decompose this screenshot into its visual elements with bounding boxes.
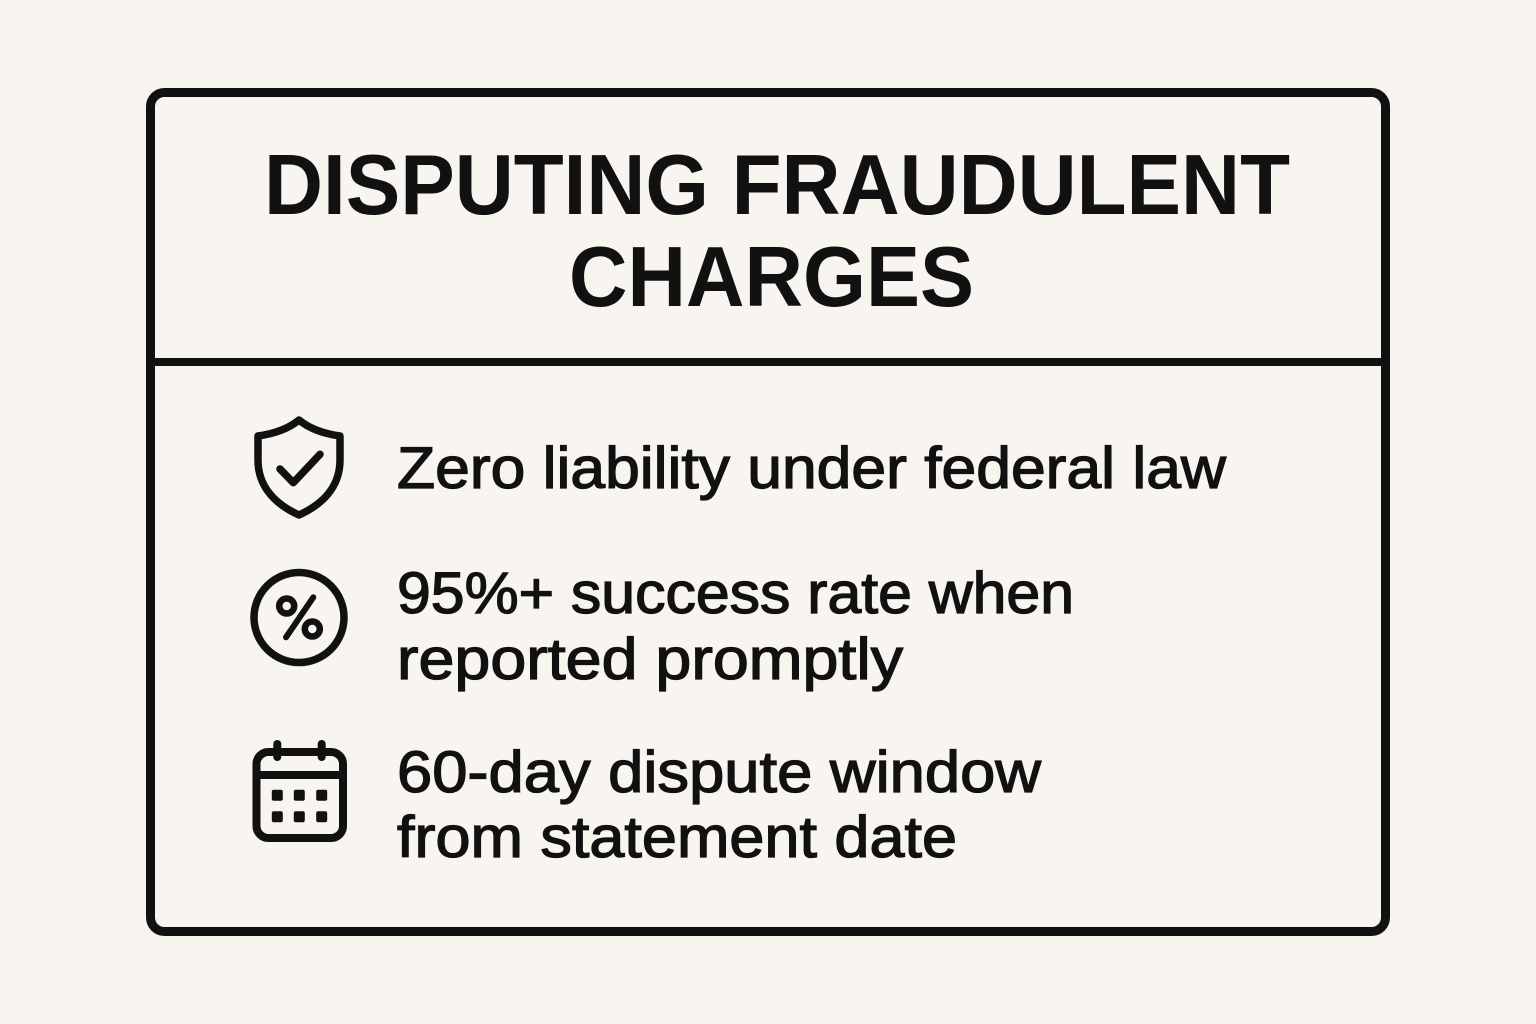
title bbox=[264, 138, 1290, 325]
text: zero liability: Zero liability under federal law bbox=[397, 436, 1227, 501]
text: dispute window bbox=[397, 740, 1042, 870]
text: success rate: 95%+ success rate when bbox=[397, 561, 1074, 626]
text: dispute window: 60-day dispute window bbox=[397, 740, 1042, 805]
text: success rate: reported promptly bbox=[397, 627, 903, 692]
icon: calendar bbox=[256, 744, 343, 838]
text: dispute window: from statement date bbox=[397, 805, 957, 870]
title: CHARGES bbox=[569, 230, 974, 325]
icon: shield with check mark bbox=[258, 420, 340, 515]
icon: percent in circle bbox=[254, 572, 344, 662]
title: DISPUTING FRAUDULENT bbox=[264, 138, 1290, 233]
text: success rate bbox=[397, 561, 1074, 692]
panel: outer frame bbox=[150, 92, 1386, 932]
